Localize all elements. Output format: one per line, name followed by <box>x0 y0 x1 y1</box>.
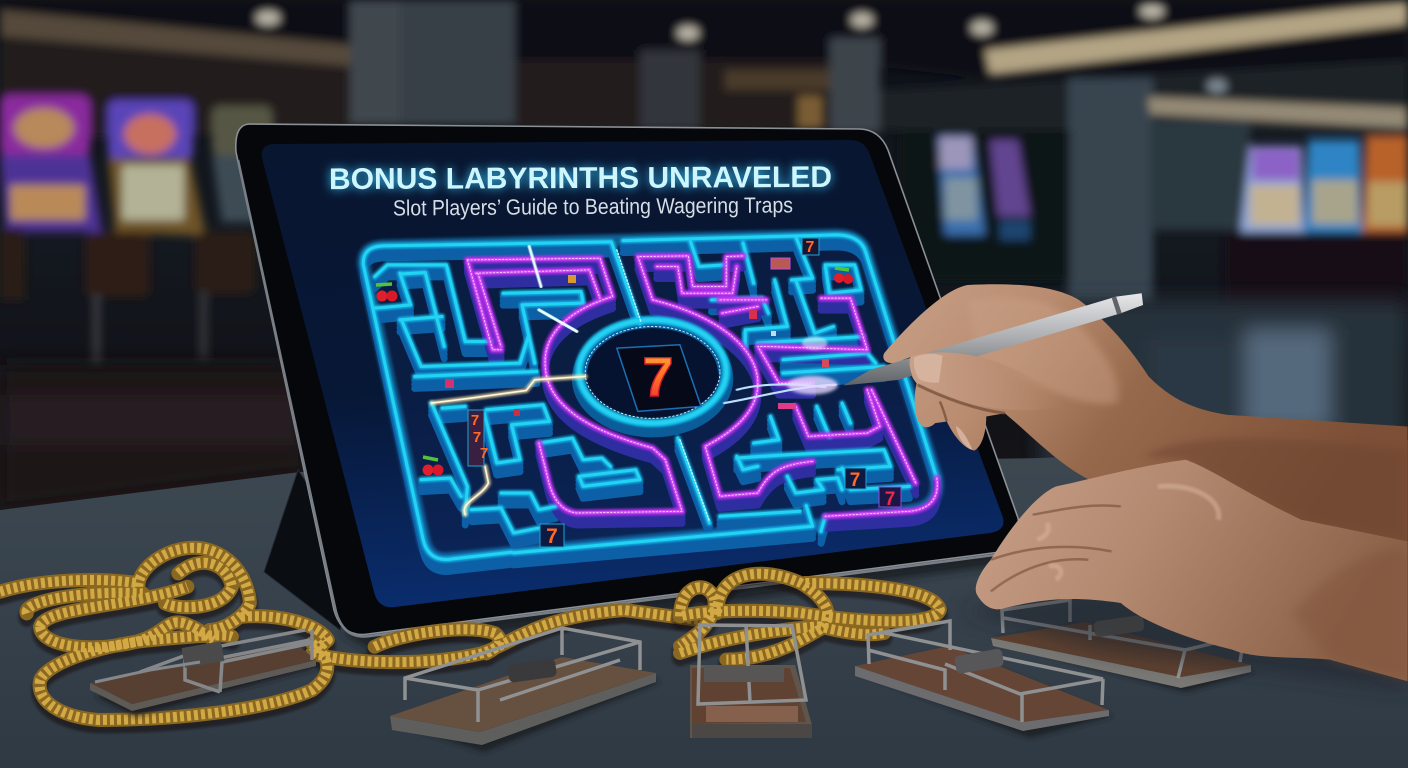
dotted center wall highlight <box>617 250 709 521</box>
central jackpot tile <box>617 345 701 411</box>
thumb <box>910 352 1065 410</box>
mousetrap center left <box>390 628 660 752</box>
large seven: 7 <box>642 345 674 408</box>
seven tiles <box>468 238 901 548</box>
dotted path highlight <box>467 256 937 516</box>
mousetrap center right <box>855 621 1112 738</box>
subtitle: Slot Players’ Guide to Beating Wagering Traps <box>393 192 793 221</box>
hand back highlight <box>968 297 1118 404</box>
neon purple glow <box>467 256 937 516</box>
spring <box>704 666 784 682</box>
lower finger nail <box>956 426 972 450</box>
tablet lower rim <box>238 160 1002 636</box>
seven tiles: 7 <box>885 489 895 510</box>
purple wall side faces <box>467 260 937 528</box>
seven tiles: 7 <box>473 429 481 446</box>
neon purple walls <box>467 256 937 516</box>
thumb nail <box>914 354 943 383</box>
seven tiles: 7 <box>480 445 488 462</box>
slot machines left <box>0 95 272 365</box>
seven tiles: 7 <box>471 412 479 429</box>
tablet shadow <box>340 545 1040 650</box>
maze floor glow <box>363 235 937 560</box>
seven tiles: 7 <box>850 470 860 491</box>
right arm shadow on table <box>960 560 1408 690</box>
tablet <box>236 124 1040 650</box>
cherries <box>376 268 853 476</box>
stylus <box>843 293 1143 386</box>
floor <box>0 300 1408 510</box>
tablet stand <box>264 470 360 630</box>
finger separations <box>991 506 1121 591</box>
cove lights <box>798 2 1408 128</box>
upper hand holding stylus <box>843 284 1408 541</box>
gold rope right knot <box>680 574 940 665</box>
title: BONUS LABYRINTHS UNRAVELED <box>329 161 832 196</box>
title: BONUS LABYRINTHS UNRAVELED <box>329 161 832 196</box>
spring <box>507 658 557 683</box>
tablet screen <box>262 140 1004 607</box>
spring <box>1093 615 1145 638</box>
mousetrap far left <box>90 630 316 716</box>
mousetrap center <box>690 625 812 738</box>
wall side faces <box>363 239 937 571</box>
upper hand and arm <box>883 284 1408 541</box>
neon cyan walls <box>363 235 937 560</box>
seven tiles: 7 <box>546 525 558 548</box>
small symbol tiles <box>445 258 829 416</box>
finger shadow under thumb <box>918 385 1005 413</box>
table top <box>0 440 1408 768</box>
traced glowing path <box>432 376 585 515</box>
central ring <box>579 320 726 423</box>
spring <box>954 648 1004 674</box>
ceiling spot lights <box>256 4 1227 93</box>
slot machines right <box>938 136 1408 312</box>
lower resting hand <box>976 460 1408 681</box>
lower hand and arm <box>976 460 1408 681</box>
ceiling and pillars <box>0 0 1408 303</box>
knuckle highlights <box>1037 486 1219 580</box>
central ring side face <box>579 327 726 430</box>
tablet body <box>236 124 1019 634</box>
seven tiles: 7 <box>806 239 815 256</box>
wrist shading <box>1292 549 1408 681</box>
mousetrap right <box>991 600 1255 692</box>
gold rope left <box>0 548 699 725</box>
arm shading <box>1144 438 1408 541</box>
curled finger separation <box>940 402 947 422</box>
sparkle streaks <box>529 247 838 403</box>
neon cyan glow <box>363 235 937 560</box>
maze <box>363 235 937 571</box>
